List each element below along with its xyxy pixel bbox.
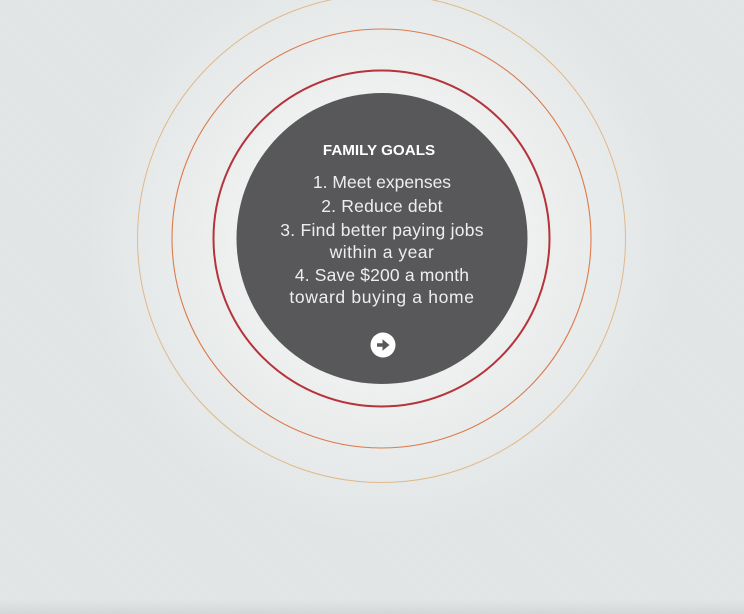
goal 4: toward buying a home (289, 287, 475, 307)
goal 3: within a year (330, 242, 434, 262)
goal 4: 4. Save $200 a month (295, 265, 469, 285)
goal 3 (280, 220, 484, 262)
panel: family goals text (280, 142, 484, 307)
goal 1: 1. Meet expenses (313, 172, 451, 192)
goal 3: 3. Find better paying jobs (280, 220, 484, 240)
heading: FAMILY GOALS (323, 142, 435, 159)
goal 2: 2. Reduce debt (321, 196, 443, 216)
goal 4 (289, 265, 475, 307)
